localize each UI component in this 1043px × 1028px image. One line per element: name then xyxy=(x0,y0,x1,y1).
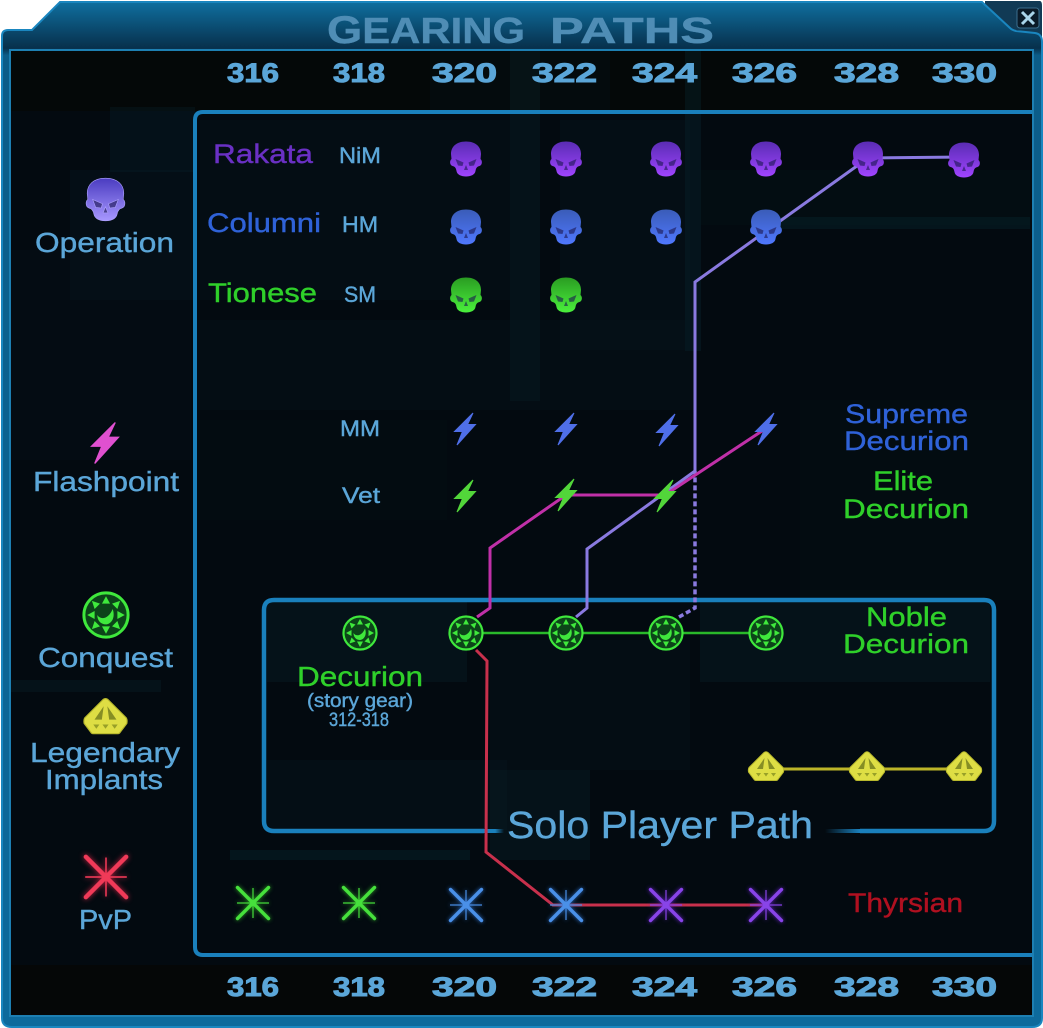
legend: PvP: PvP xyxy=(79,904,132,935)
panel: solo player path outline xyxy=(264,600,994,833)
title xyxy=(327,9,714,52)
label: Solo Player Path: Solo Player Path xyxy=(507,805,813,847)
legend: Legendary Implants: Implants xyxy=(45,764,163,795)
path line: flashpoint magenta xyxy=(477,429,765,617)
label: Elite Decurion: Decurion xyxy=(843,494,969,524)
top item level axis: 322 xyxy=(532,58,597,88)
label: NiM: NiM xyxy=(339,143,381,168)
label: Decurion story gear xyxy=(297,661,423,731)
label: Decurion story gear: (story gear) xyxy=(307,691,413,712)
legend: Operation: Operation xyxy=(35,227,174,258)
path line: operation purple xyxy=(576,157,964,617)
label: Supreme Decurion: Supreme xyxy=(845,399,968,429)
icons: blue lightning bolts xyxy=(454,413,776,446)
legend: Flashpoint xyxy=(33,423,179,497)
top item level axis xyxy=(227,58,997,88)
panel: gear paths outline xyxy=(195,112,1032,955)
label: Rakata: Rakata xyxy=(213,139,314,169)
path line: implants yellow xyxy=(766,768,964,770)
label: Supreme Decurion: Decurion xyxy=(844,426,969,456)
legend: Legendary Implants: Legendary xyxy=(30,737,180,768)
label: Tionese: Tionese xyxy=(208,278,317,308)
top item level axis: 320 xyxy=(432,58,497,88)
label: SM: SM xyxy=(344,282,376,307)
label: Elite Decurion: Elite xyxy=(873,466,933,496)
icons: Columni skulls xyxy=(450,210,782,244)
title: GEARING xyxy=(327,9,525,52)
top item level axis: 330 xyxy=(932,58,997,88)
legend: Operation xyxy=(35,178,174,258)
label: Thyrsian: Thyrsian xyxy=(848,888,963,918)
close button xyxy=(1017,8,1039,28)
top item level axis: 318 xyxy=(333,58,385,88)
label: Noble Decurion: Decurion xyxy=(843,629,969,659)
top item level axis: 324 xyxy=(632,58,697,88)
bottom item level axis: 330 xyxy=(932,972,997,1002)
bottom item level axis: 322 xyxy=(532,972,597,1002)
top item level axis: 328 xyxy=(834,58,899,88)
label: Supreme Decurion xyxy=(844,399,969,456)
legend: Legendary Implants xyxy=(30,699,180,795)
label: MM: MM xyxy=(340,416,380,441)
bottom item level axis: 326 xyxy=(732,972,797,1002)
icons: Rakata skulls xyxy=(450,142,980,178)
bottom item level axis xyxy=(227,972,997,1002)
bottom item level axis: 316 xyxy=(227,972,279,1002)
legend: Flashpoint: Flashpoint xyxy=(33,466,179,497)
bottom item level axis: 320 xyxy=(432,972,497,1002)
label: Noble Decurion xyxy=(843,602,969,659)
path line: PvP red xyxy=(476,650,766,905)
icons: implant gems xyxy=(748,752,982,780)
label: HM: HM xyxy=(342,212,378,237)
icons: green lightning bolts xyxy=(454,479,676,512)
label: Columni: Columni xyxy=(207,208,321,238)
top item level axis: 326 xyxy=(732,58,797,88)
path line: operation dotted xyxy=(679,471,695,617)
label: Decurion story gear: 312-318 xyxy=(329,710,389,731)
bottom item level axis: 328 xyxy=(834,972,899,1002)
path line: conquest green xyxy=(466,632,766,634)
icons: PvP green stars xyxy=(237,888,375,918)
label: Decurion story gear: Decurion xyxy=(297,661,423,692)
title: PATHS xyxy=(550,10,714,51)
top item level axis: 316 xyxy=(227,58,279,88)
legend: Conquest: Conquest xyxy=(38,642,173,673)
icons: conquest medals xyxy=(344,616,782,650)
icons: Tionese skulls xyxy=(450,278,582,312)
bottom item level axis: 318 xyxy=(333,972,385,1002)
label: Vet: Vet xyxy=(342,483,380,508)
icons: PvP purple stars xyxy=(650,890,782,920)
legend: Conquest xyxy=(38,593,173,673)
label: Elite Decurion xyxy=(843,466,969,524)
bottom item level axis: 324 xyxy=(632,972,697,1002)
icons: PvP blue stars xyxy=(450,890,582,920)
label: Noble Decurion: Noble xyxy=(866,602,947,632)
legend: PvP xyxy=(79,857,132,935)
